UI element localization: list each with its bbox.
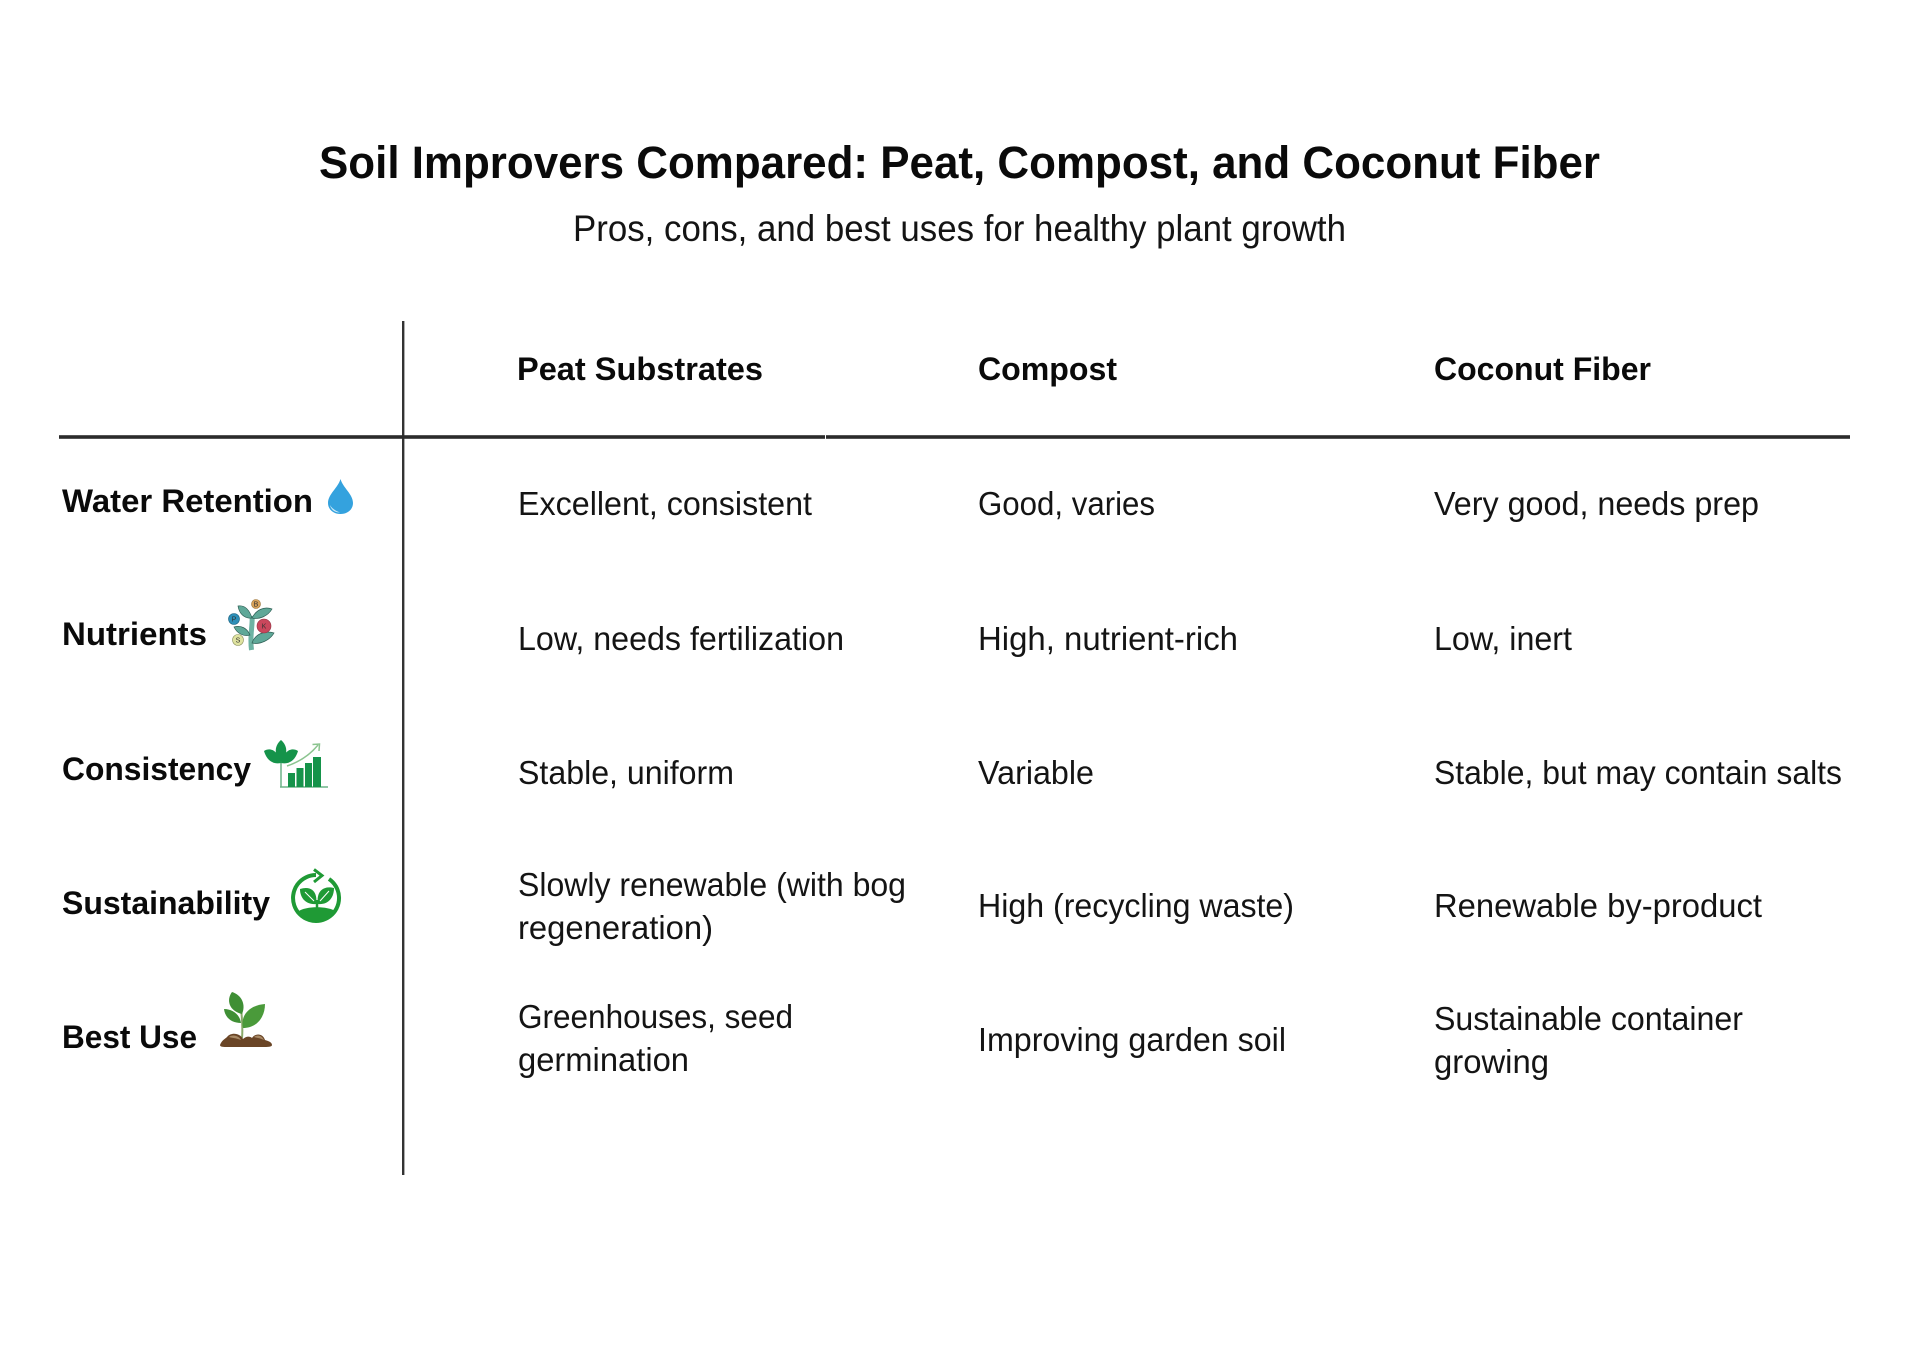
column headers: Peat Substrates	[517, 351, 763, 387]
row: consistency: Variable	[978, 754, 1094, 791]
row: best use: Best Use	[62, 1019, 197, 1055]
row: consistency: Stable, but may contain salts	[1434, 754, 1842, 791]
row: water retention	[62, 479, 1759, 522]
row: sustainability: High (recycling waste)	[978, 887, 1294, 924]
row: nutrients: High, nutrient-rich	[978, 620, 1238, 657]
row: consistency: Stable, uniform	[518, 754, 734, 791]
row: water retention: Very good, needs prep	[1434, 485, 1759, 522]
row: sustainability: Sustainability	[62, 885, 270, 921]
row: nutrients: Nutrients	[62, 616, 207, 652]
row: sustainability: Slowly renewable (with bog	[518, 866, 906, 903]
row: best use: germination	[518, 1041, 689, 1078]
row: water retention: Water Retention	[62, 483, 313, 519]
column headers	[517, 351, 1651, 387]
comparison table	[59, 321, 1850, 1175]
column headers: Coconut Fiber	[1434, 351, 1651, 387]
row: best use: Greenhouses, seed	[518, 998, 793, 1035]
icon: nutrient plant: B	[254, 602, 259, 608]
row: sustainability	[62, 866, 1762, 946]
icon: nutrient plant: S	[236, 638, 241, 644]
row: nutrients: Low, inert	[1434, 620, 1572, 657]
row: sustainability: Renewable by-product	[1434, 887, 1762, 924]
subtitle: Pros, cons, and best uses for healthy plant growth	[573, 208, 1346, 249]
row: best use: growing	[1434, 1043, 1549, 1080]
title: Soil Improvers Compared: Peat, Compost, and Coconut Fiber	[319, 137, 1600, 188]
column headers: Compost	[978, 351, 1117, 387]
row: sustainability: regeneration)	[518, 909, 713, 946]
row: best use: Improving garden soil	[978, 1021, 1286, 1058]
icon: nutrient plant: P	[232, 616, 237, 624]
row: best use: Sustainable container	[1434, 1000, 1743, 1037]
row: water retention: Excellent, consistent	[518, 485, 812, 522]
row: best use	[62, 992, 1743, 1080]
icon: seedling bar chart	[264, 740, 328, 787]
row: consistency: Consistency	[62, 751, 251, 787]
row: nutrients: Low, needs fertilization	[518, 620, 844, 657]
icon: sprout in soil	[220, 992, 272, 1047]
row: nutrients	[62, 600, 1572, 657]
icon: recycling sprout	[293, 870, 339, 922]
icon: water drop	[328, 479, 353, 514]
icon: nutrient plant	[228, 600, 274, 650]
row: consistency	[62, 740, 1842, 791]
icon: nutrient plant: K	[262, 624, 267, 630]
row: water retention: Good, varies	[978, 485, 1155, 522]
